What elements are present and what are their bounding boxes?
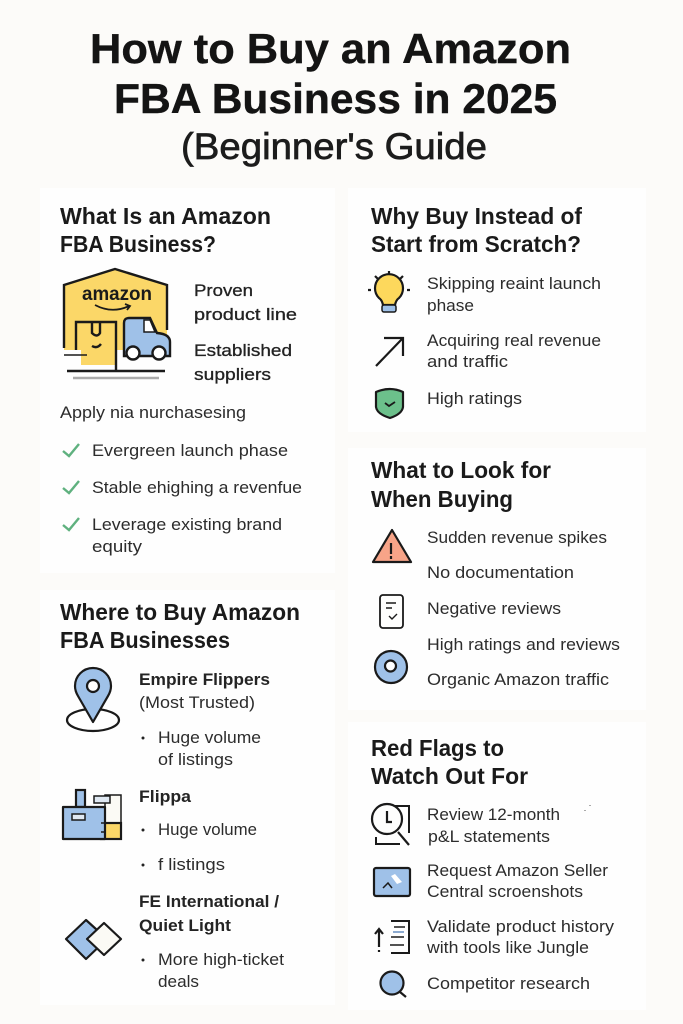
- heading: where to buy: FBA Businesses: [60, 627, 230, 653]
- text: review statements: p&L statements: [428, 827, 550, 846]
- heading: why buy: Why Buy Instead of: [371, 203, 582, 229]
- text: validate history: [426, 917, 615, 957]
- text: Empire Flippers: Huge volume: [158, 728, 261, 747]
- text: Empire Flippers: Empire Flippers: [139, 670, 270, 689]
- icon: magnifier: [380, 972, 406, 997]
- checklist: Leverage existing brand: [92, 515, 282, 534]
- text: Flippa: Flippa: [139, 787, 192, 806]
- icon: green shield: [376, 389, 403, 418]
- icon: light bulb: [368, 271, 410, 312]
- heading: what to look for: [371, 457, 551, 512]
- heading: red flags: [371, 735, 528, 789]
- text: skipping launch: [427, 274, 601, 315]
- text: validate history: Validate product history: [427, 917, 615, 936]
- text: Empire Flippers: of listings: [158, 750, 233, 769]
- text: request screenshots: Request Amazon Seller: [427, 861, 608, 880]
- icon: overlapping diamonds: [66, 920, 121, 959]
- heading: what is: [60, 203, 271, 257]
- text: high ratings and reviews: High ratings and reviews: [427, 635, 620, 654]
- text: warning items: No documentation: [427, 563, 574, 582]
- text: request screenshots: [427, 861, 608, 901]
- icon: map pin: [67, 668, 119, 731]
- text: competitor research: Competitor research: [427, 974, 590, 993]
- text: negative reviews: Negative reviews: [427, 599, 561, 618]
- checklist: Evergreen launch phase: [92, 441, 288, 460]
- icon: warning triangle: [373, 530, 411, 562]
- icon: document check: [380, 595, 403, 628]
- title: How to Buy an Amazon: [90, 25, 571, 72]
- panel: red flags: [348, 722, 646, 1010]
- text: skipping launch: phase: [427, 296, 474, 315]
- heading: red flags: Watch Out For: [371, 763, 528, 789]
- text: high ratings: High ratings: [427, 389, 522, 408]
- panel: what to look for: [348, 448, 646, 710]
- text: acquiring revenue: and traffic: [427, 352, 509, 371]
- text: Flippa: Huge volume: [158, 820, 257, 839]
- heading: where to buy: [60, 599, 300, 653]
- title: [90, 25, 571, 167]
- text: FE International / Quiet Light: FE International /: [139, 892, 279, 911]
- checklist: Stable ehighing a revenfue: [92, 478, 302, 497]
- panel: where to buy: [40, 590, 335, 1005]
- heading: what to look for: When Buying: [371, 486, 513, 512]
- icon: screenshot: [374, 868, 410, 896]
- heading: what is: FBA Business?: [60, 231, 216, 257]
- icon: product history list: [375, 921, 409, 953]
- text: request screenshots: Central scroenshots: [427, 882, 583, 901]
- title: FBA Business in 2025: [114, 75, 557, 122]
- text: FE International / Quiet Light: [139, 892, 284, 991]
- text: Flippa: [139, 787, 257, 874]
- checklist: equity: [92, 537, 143, 556]
- icon: amazon warehouse and truck: amazon: [82, 284, 152, 305]
- text: FE International / Quiet Light: deals: [158, 972, 199, 991]
- icon: amazon warehouse and truck: [64, 269, 170, 378]
- checklist: [63, 441, 302, 556]
- text: FE International / Quiet Light: Quiet Light: [139, 916, 231, 935]
- text: FE International / Quiet Light: More high-ticket: [158, 950, 284, 969]
- heading: red flags: Red Flags to: [371, 735, 504, 761]
- text: product and supplier points: product line: [194, 305, 297, 324]
- text: Flippa: f listings: [158, 855, 225, 874]
- text: review statements: Review 12-month: [427, 805, 560, 824]
- text: skipping launch: Skipping reaint launch: [427, 274, 601, 293]
- icon: blue target: [375, 651, 407, 683]
- title: (Beginner's Guide: [181, 126, 487, 167]
- icon: arrow up right: [376, 338, 403, 366]
- text: product and supplier points: Proven: [194, 281, 253, 300]
- text: Empire Flippers: [139, 670, 270, 769]
- text: apply line: Apply nia nurchasesing: [60, 403, 246, 422]
- heading: why buy: Start from Scratch?: [371, 231, 581, 257]
- text: acquiring revenue: Acquiring real revenue: [427, 331, 601, 350]
- text: review statements: [427, 805, 560, 846]
- text: warning items: [427, 528, 607, 582]
- heading: why buy: [371, 203, 582, 257]
- text: organic traffic: Organic Amazon traffic: [427, 670, 610, 689]
- text: product and supplier points: suppliers: [194, 365, 271, 384]
- text: product and supplier points: Established: [194, 341, 292, 360]
- text: Empire Flippers: (Most Trusted): [139, 693, 255, 712]
- icon: Flippa storefront: [63, 790, 121, 839]
- heading: what to look for: What to Look for: [371, 457, 551, 483]
- text: warning items: Sudden revenue spikes: [427, 528, 607, 547]
- heading: where to buy: Where to Buy Amazon: [60, 599, 300, 625]
- panel: why buy instead of start: [348, 188, 646, 432]
- heading: what is: What Is an Amazon: [60, 203, 271, 229]
- icon: clock magnifier: [372, 804, 409, 845]
- text: validate history: with tools like Jungle: [426, 938, 589, 957]
- text: product and supplier points: [194, 281, 297, 384]
- text: acquiring revenue: [427, 331, 601, 371]
- panel: what is an Amazon FBA business: [40, 188, 335, 573]
